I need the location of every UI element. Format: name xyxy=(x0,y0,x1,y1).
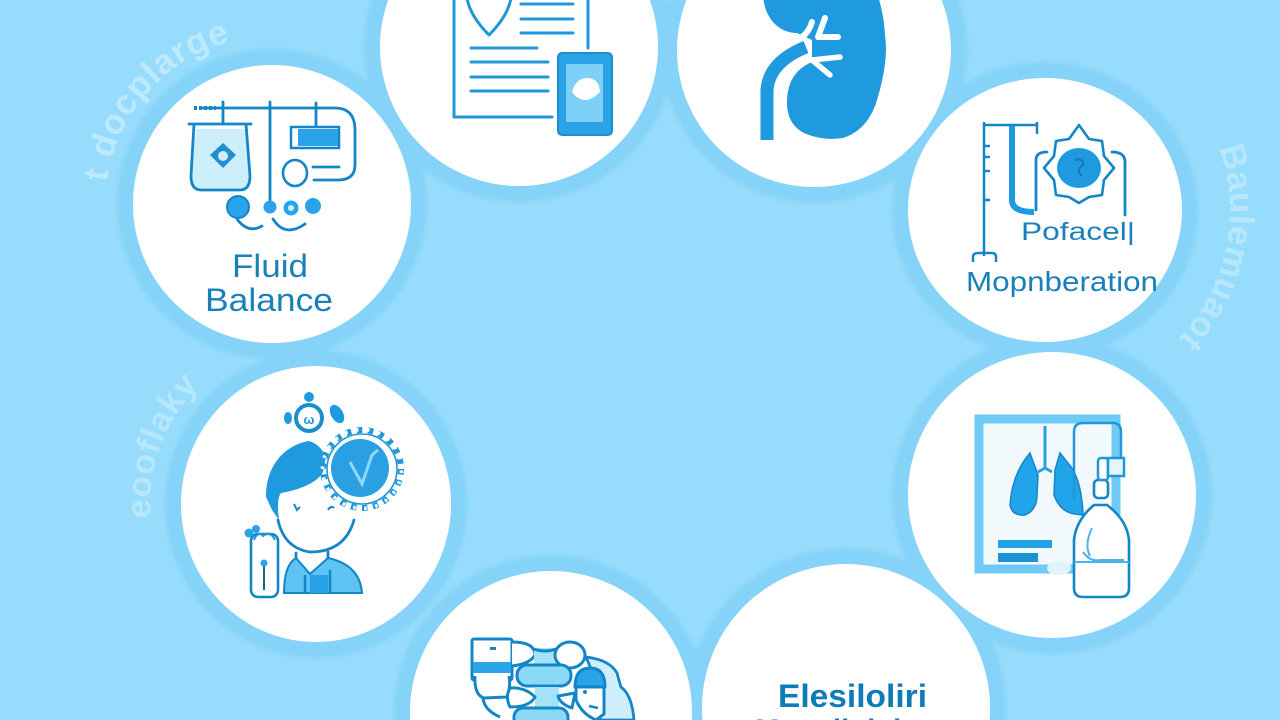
label: Potacel Monitoration: Pofacel| xyxy=(1021,218,1135,246)
label: Potacel Monitoration: Mopnberation xyxy=(966,266,1158,297)
panel: electrolyte monitoring xyxy=(702,564,990,720)
panel: lungs and oxygen xyxy=(908,352,1196,638)
icon: IV stand and gear xyxy=(973,122,1125,262)
label: Fluid Balance: Balance xyxy=(205,282,333,318)
panel: head and mental status xyxy=(181,366,451,642)
icon: IV fluid balance xyxy=(189,102,355,230)
panel: fluid balance xyxy=(133,65,411,343)
icon: anatomy and clinician xyxy=(472,639,634,720)
panel: care team xyxy=(410,571,692,720)
panel: patient monitoring xyxy=(908,78,1182,342)
curved label: right: Baulemuaot xyxy=(1179,144,1255,351)
label: Elesiloliri Monitoring: Elesiloliri xyxy=(778,678,927,714)
icon: kidney xyxy=(763,0,886,140)
curved label: upper left: t docplarge xyxy=(85,26,228,180)
label: Fluid Balance: Fluid xyxy=(232,248,308,284)
panel: kidney xyxy=(677,0,951,187)
curved label: lower left: eooflaky xyxy=(132,374,196,517)
icon: chest x-ray and oxygen bottle xyxy=(979,419,1129,597)
icon: document with tablet xyxy=(454,0,612,135)
icon: person with gear xyxy=(244,392,402,597)
panel: patient record xyxy=(380,0,658,186)
icon: person with gear: ω xyxy=(304,412,315,427)
